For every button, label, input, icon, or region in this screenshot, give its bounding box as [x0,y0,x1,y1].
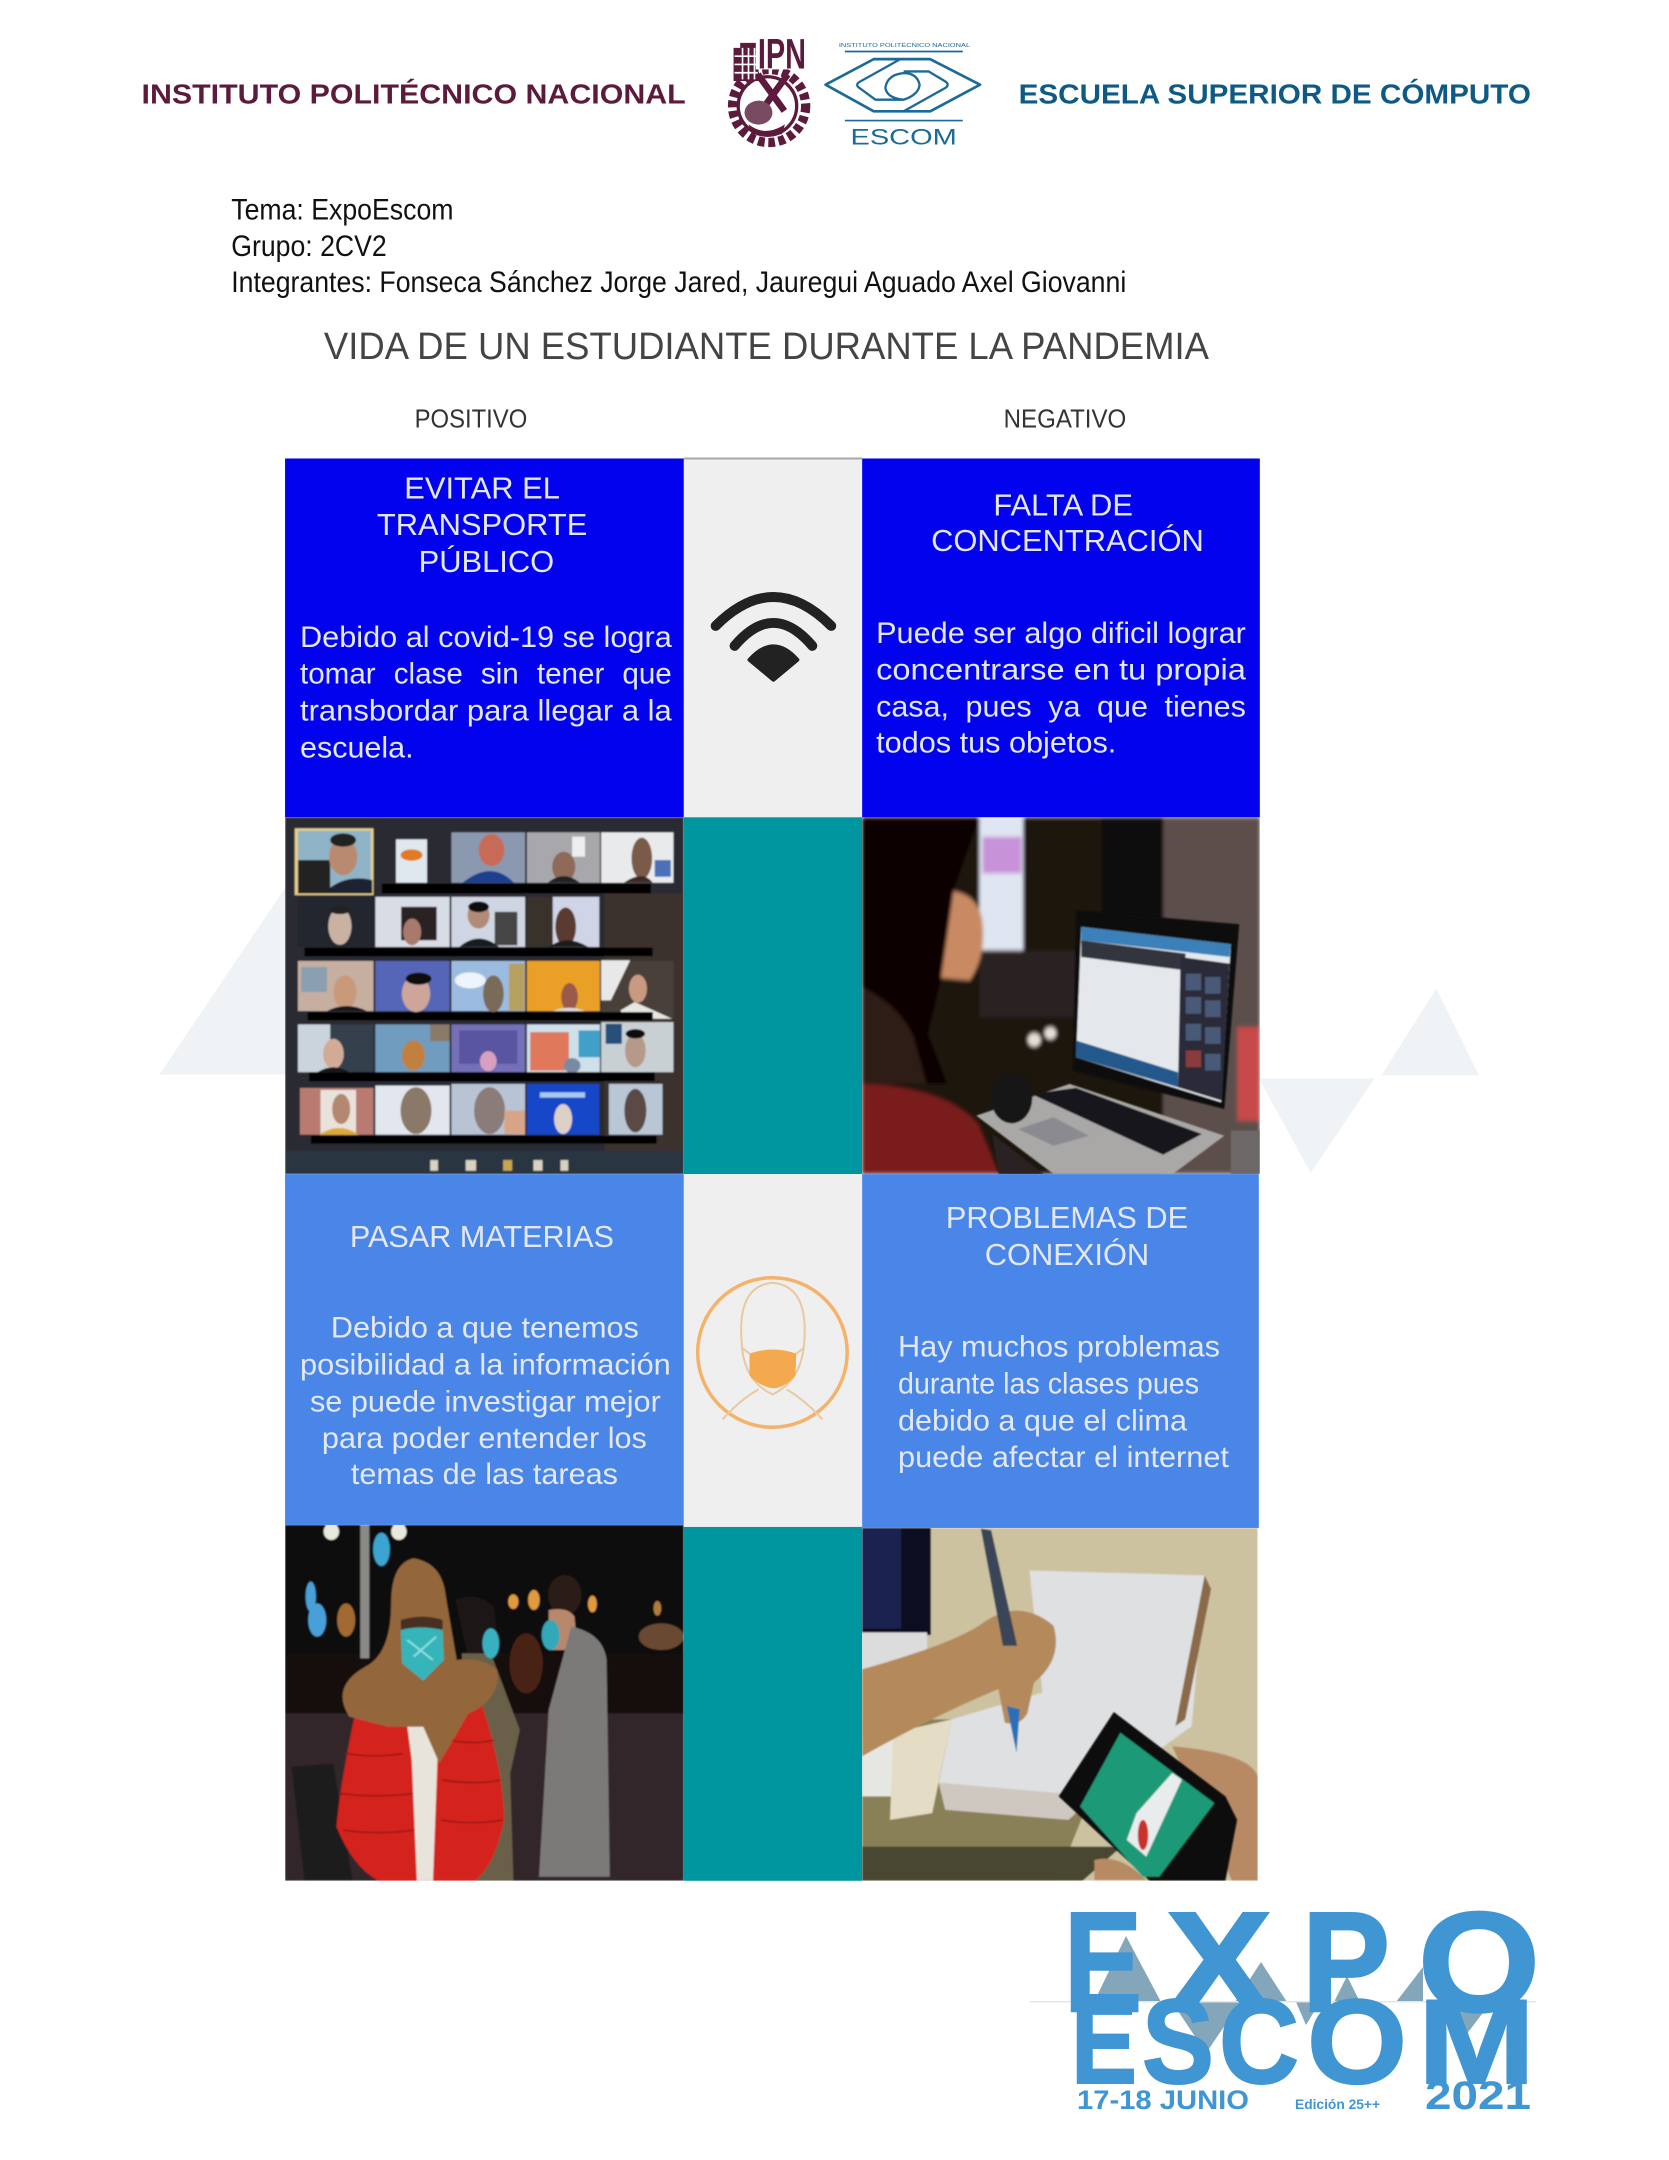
ESCOM wordmark: E [1071,1975,1137,2109]
date: 17-18 JUNIO [1077,2085,1249,2115]
body text: se puede investigar mejor [310,1385,661,1418]
background woman [462,1653,520,1881]
body text: debido a que el clima [898,1404,1187,1437]
photo: video call gallery [285,817,684,1174]
row 3 [298,961,373,1011]
heading: PASAR MATERIAS [350,1219,614,1254]
body text: Puede ser algo dificil lograr [876,617,1246,650]
panel: problemas de conexión [862,1174,1259,1528]
woman jacket [336,1700,423,1881]
ESCOM wordmark: C [1219,1975,1299,2109]
body text: Debido al covid-19 se logra [300,621,672,654]
body text [876,617,1246,760]
logo: Expo Escom 2021 [1030,1883,1540,2118]
heading: CONCENTRACIÓN [931,523,1204,558]
EXPO wordmark: O [1418,1883,1540,2042]
icon: wifi [716,597,831,680]
body text: casa, pues ya que tienes [876,691,1246,724]
hair [343,1558,498,1763]
EXPO wordmark: E [1064,1883,1142,2042]
row 2 [298,897,373,947]
body text: durante las clases pues [898,1367,1199,1400]
background watermark triangles [159,882,1479,1173]
document details [231,193,1126,299]
logo triangles [1094,1936,1485,2053]
toolbar [285,1151,684,1174]
document details: Integrantes: Fonseca Sánchez Jorge Jared, Jauregui Aguado Axel Giovanni [231,266,1126,299]
heading: PÚBLICO [419,544,554,579]
header: Instituto Politécnico Nacional: INSTITUTO POLITÉCNICO NACIONAL [142,79,686,110]
body text: escuela. [300,731,414,764]
ESCOM wordmark: M [1418,1975,1535,2109]
column heading: negativo: NEGATIVO [1004,406,1126,434]
logo: IPN shield [733,31,806,143]
logo: ESCOM: INSTITUTO POLITÉCNICO NACIONAL [839,42,970,49]
heading: EVITAR EL [404,470,560,505]
body text [898,1331,1230,1474]
black redaction bars [304,883,657,1144]
year: 2021 [1425,2074,1531,2118]
panel: pasar materias [285,1174,684,1525]
ESCOM wordmark [1071,1975,1535,2109]
row 1 [295,828,373,895]
title: VIDA DE UN ESTUDIANTE DURANTE LA PANDEMIA [324,326,1210,368]
body text: Hay muchos problemas [898,1331,1220,1364]
icon: face mask [698,1278,847,1427]
heading [946,1200,1188,1272]
logo: IPN shield: IPN [758,31,806,78]
logo: ESCOM: ESCOM [851,125,957,150]
body text: transbordar para llegar a la [300,695,672,728]
ESCOM wordmark: O [1307,1975,1407,2109]
document details: Tema: ExpoEscom [231,193,453,226]
row 5 [300,1088,373,1135]
scarf and shirt [401,1677,441,1881]
ESCOM wordmark: S [1142,1975,1214,2109]
heading: PROBLEMAS DE [946,1200,1188,1235]
body text: temas de las tareas [351,1458,618,1491]
photo: student with laptop [862,817,1260,1174]
panel: falta de concentración [862,458,1260,817]
header: Escuela Superior de Cómputo: ESCUELA SUPERIOR DE CÓMPUTO [1019,79,1531,110]
background man [548,1575,581,1615]
EXPO wordmark: X [1166,1883,1272,2042]
body text: concentrarse en tu propia [876,654,1246,687]
edition: Edición 25++ [1295,2096,1380,2112]
body text: puede afectar el internet [898,1441,1230,1474]
heading: FALTA DE [993,487,1133,522]
logo: ESCOM [826,42,980,150]
heading: TRANSPORTE [377,507,587,542]
EXPO wordmark [1064,1883,1540,2042]
body text: para poder entender los [322,1422,647,1455]
photo: woman with mask at night [285,1525,684,1881]
body text [300,1312,671,1491]
body text: Debido a que tenemos [331,1312,639,1345]
photo: hand writing notes and phone [862,1528,1258,1881]
body text: tomar clase sin tener que [300,658,672,691]
body text: todos tus objetos. [876,727,1116,760]
row 4 [298,1024,373,1072]
EXPO wordmark: P [1302,1883,1390,2042]
body text: posibilidad a la información [300,1348,671,1381]
column heading: positivo: POSITIVO [415,406,527,434]
center column backgrounds [684,457,862,1881]
panel: evitar el transporte público [285,458,684,817]
document details: Grupo: 2CV2 [231,230,387,263]
heading: CONEXIÓN [985,1237,1149,1272]
body text [300,621,672,764]
